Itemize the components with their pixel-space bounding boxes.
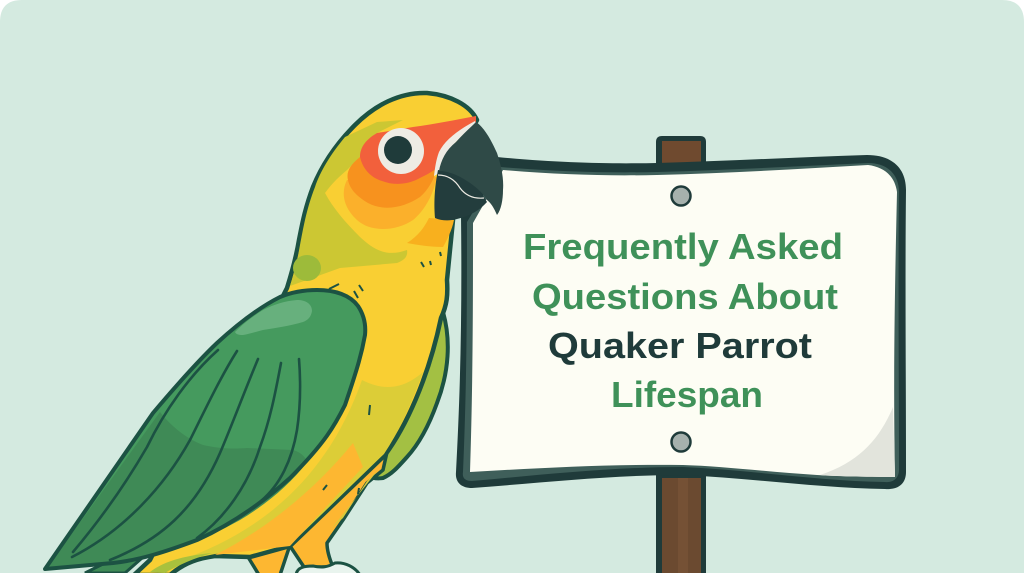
rivet top bbox=[672, 186, 690, 206]
belly lime shading bbox=[175, 372, 423, 562]
wing feather lines bbox=[72, 350, 300, 560]
sign paper shadow bbox=[820, 407, 895, 477]
title line 4: Lifespan bbox=[611, 374, 763, 415]
red face mask bbox=[360, 116, 476, 184]
back leg lime shading bbox=[332, 470, 378, 528]
wing outline bbox=[45, 290, 365, 569]
back leg bbox=[290, 452, 387, 567]
neck green patch bbox=[293, 255, 321, 281]
throat orange bbox=[407, 218, 454, 247]
lower beak bbox=[434, 170, 487, 220]
title line 1: Frequently Asked bbox=[523, 226, 843, 267]
title line 3: Quaker Parrot bbox=[548, 325, 812, 366]
eye bbox=[378, 128, 424, 174]
belly orange shading bbox=[215, 443, 363, 555]
foot bbox=[296, 563, 360, 573]
rivet bottom bbox=[672, 432, 690, 452]
wing lower shading bbox=[47, 412, 307, 568]
title line 2: Questions About bbox=[532, 276, 838, 317]
front leg bbox=[245, 545, 290, 573]
cheek light orange bbox=[344, 177, 437, 229]
beak mouth line bbox=[438, 175, 484, 198]
chest marks bbox=[323, 252, 441, 494]
signpost bbox=[656, 136, 706, 573]
far wing bbox=[368, 312, 448, 478]
upper beak bbox=[439, 122, 503, 215]
wing highlight bbox=[235, 300, 312, 335]
white face stripe bbox=[434, 121, 476, 176]
main wing fill bbox=[45, 290, 365, 569]
parrot bbox=[45, 93, 503, 573]
tail bbox=[85, 558, 142, 573]
cheek orange bbox=[348, 157, 437, 208]
sign title bbox=[523, 226, 843, 415]
head lime shading bbox=[290, 120, 407, 286]
sign board bbox=[456, 155, 906, 489]
lower left green shading bbox=[150, 553, 212, 573]
body and head bbox=[134, 93, 477, 573]
